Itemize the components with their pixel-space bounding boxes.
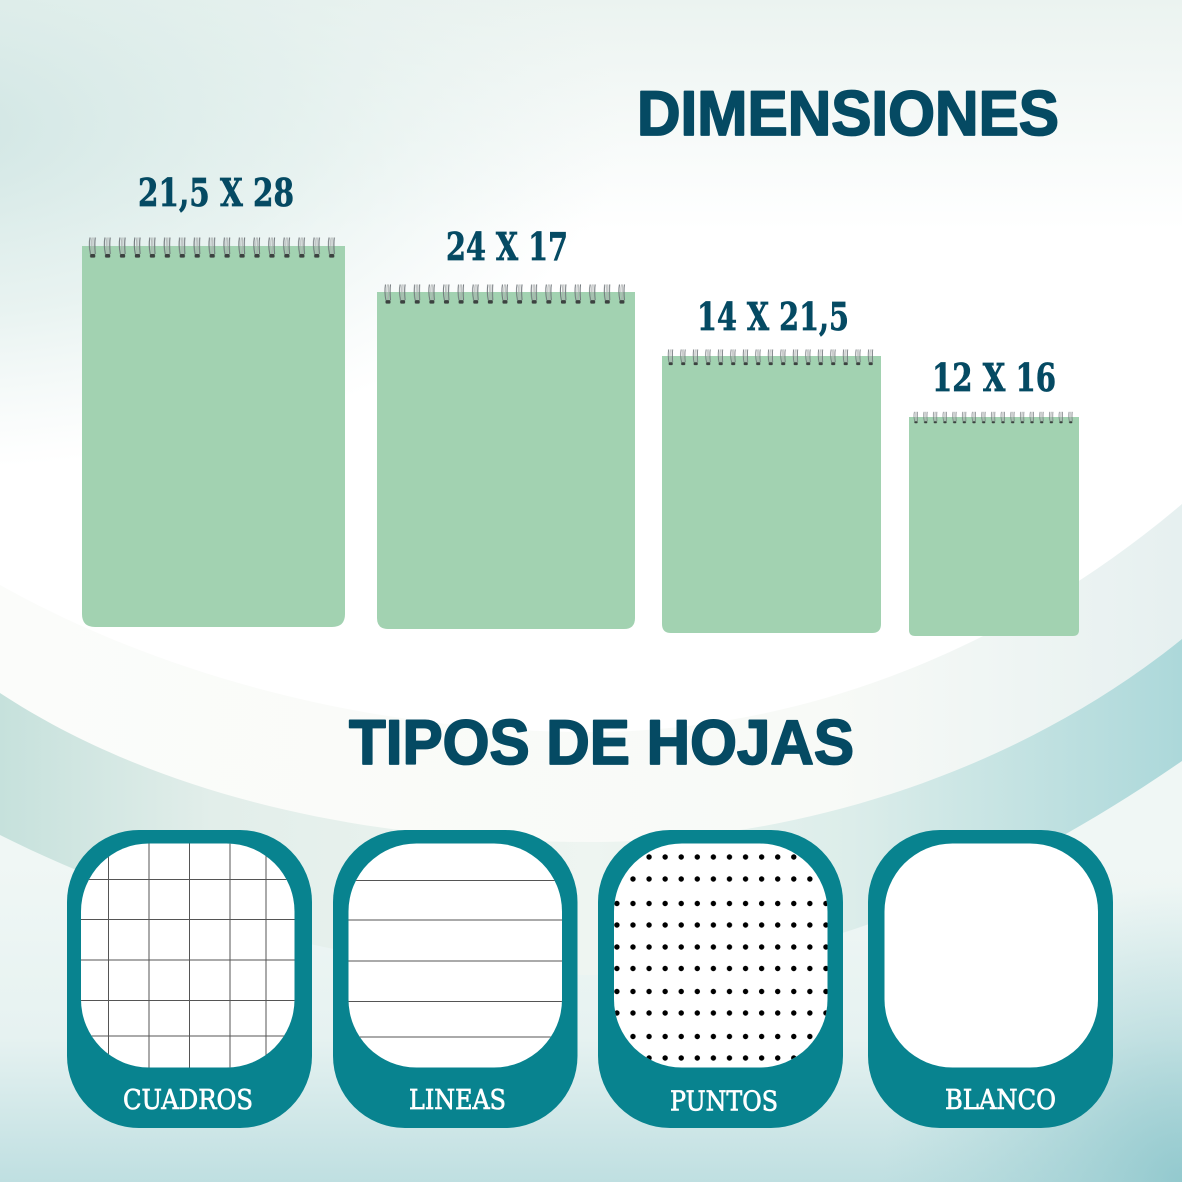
notebook 21,5 x 28	[82, 170, 345, 627]
blank sheet	[884, 844, 1098, 1068]
notebook cover	[82, 246, 345, 627]
spiral binding	[664, 349, 877, 367]
spiral binding	[85, 237, 339, 259]
title: dimensiones: DIMENSIONES	[637, 79, 1059, 149]
spiral binding	[381, 284, 629, 306]
card: lineas	[333, 830, 578, 1128]
notebook cover	[909, 417, 1079, 636]
notebook cover	[662, 356, 881, 633]
notebook cover	[377, 292, 635, 629]
label: 12 X 16: 12 X 16	[932, 355, 1056, 400]
label: 24 X 17: 24 X 17	[446, 224, 568, 269]
title: tipos de hojas: TIPOS DE HOJAS	[349, 708, 854, 778]
label: cuadros: CUADROS	[123, 1084, 253, 1116]
grid sheet	[81, 843, 295, 1068]
card: puntos	[598, 830, 843, 1128]
label: puntos: PUNTOS	[670, 1086, 778, 1118]
label: 14 X 21,5: 14 X 21,5	[697, 294, 849, 339]
notebook 14 x 21,5	[662, 294, 881, 633]
dotted sheet	[609, 844, 834, 1068]
notebook 24 x 17	[377, 224, 635, 629]
label: blanco: BLANCO	[945, 1084, 1056, 1116]
label: lineas: LINEAS	[409, 1084, 506, 1116]
card: cuadros	[67, 830, 312, 1128]
label: 21,5 X 28: 21,5 X 28	[138, 170, 294, 215]
lined sheet	[348, 844, 563, 1068]
card: blanco	[868, 830, 1113, 1128]
spiral binding	[911, 412, 1076, 426]
notebook 12 x 16	[909, 355, 1079, 636]
